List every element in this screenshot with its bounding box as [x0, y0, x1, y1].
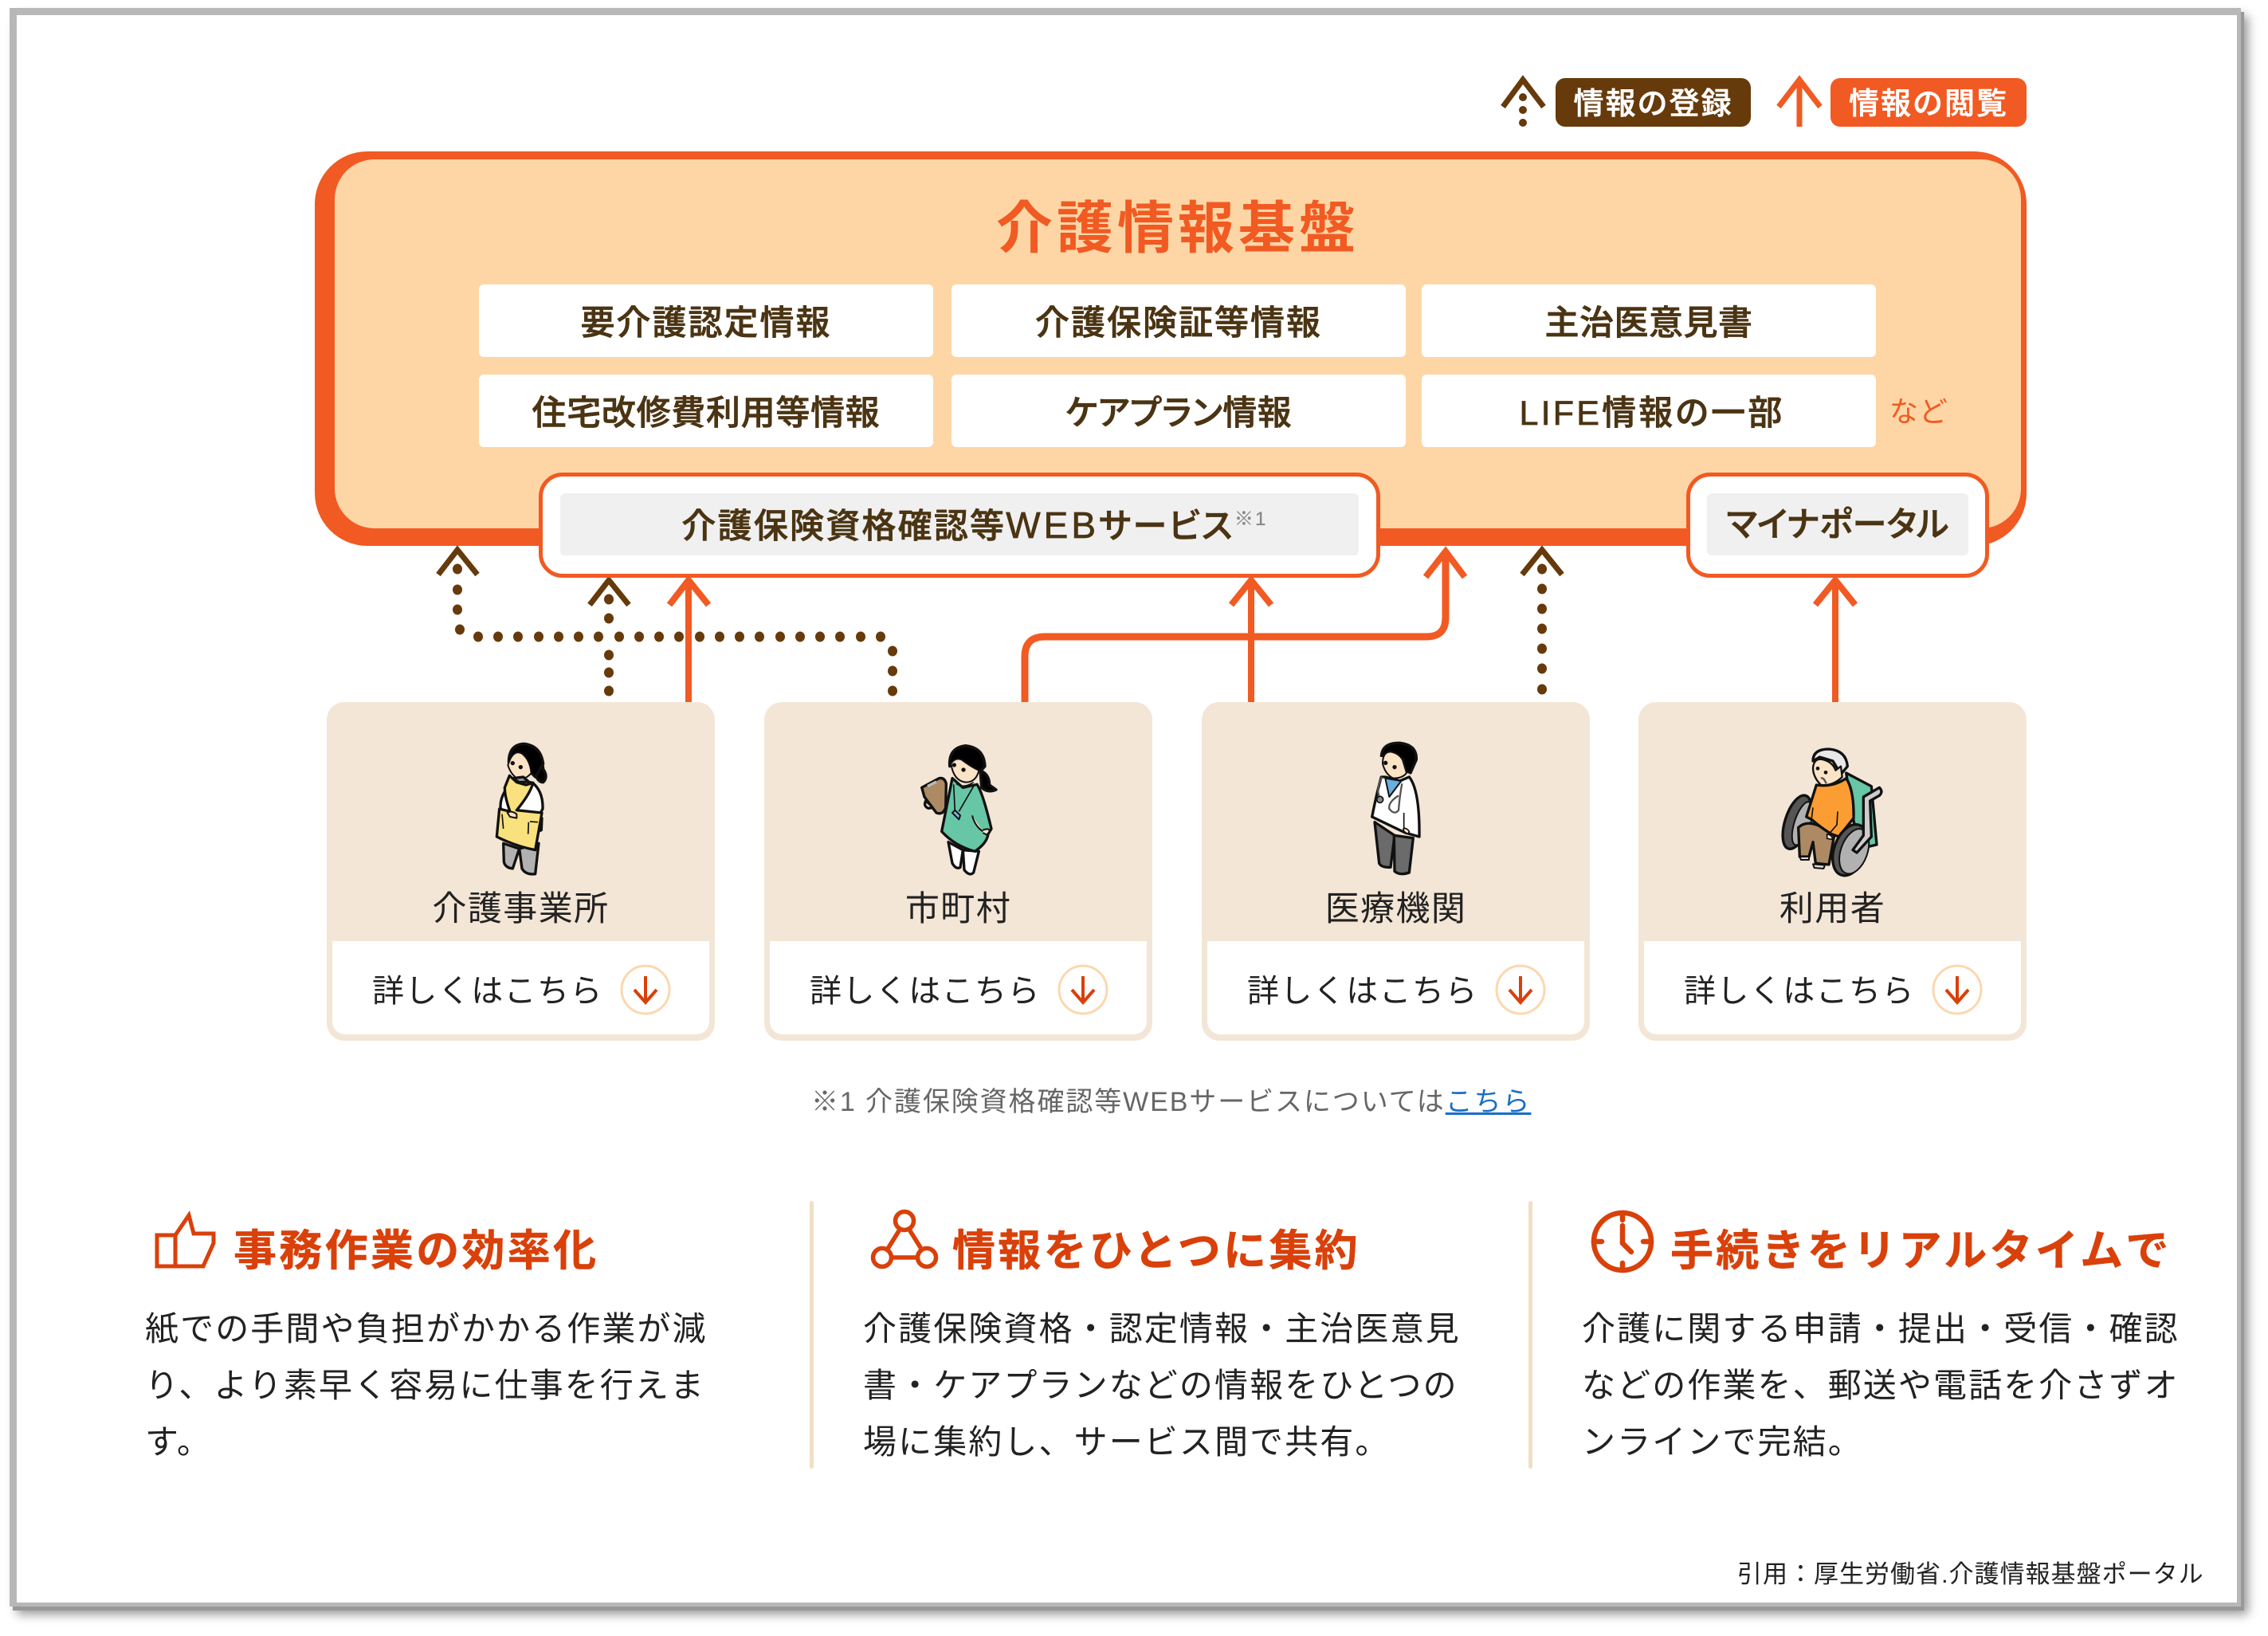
icon: down arrow: [620, 964, 671, 1015]
item: home renovation: 住宅改修費利用等情報: [532, 394, 880, 433]
benefit 1: heading: 事務作業の効率化: [233, 1227, 598, 1275]
title: 介護情報基盤: [996, 198, 1360, 261]
item: home renovation: [479, 375, 933, 447]
link text: 詳しくはこちら: [810, 974, 1041, 1009]
card label: 市町村: [905, 890, 1011, 928]
icon: down arrow: [1058, 964, 1108, 1015]
benefit 2: heading: 情報をひとつに集約: [952, 1227, 1360, 1275]
link text: 詳しくはこちら: [1684, 974, 1915, 1009]
item: LIFE: LIFE情報の一部: [1519, 394, 1785, 433]
arrow: care office view to web service: [666, 578, 711, 702]
item: care need certification: 要介護認定情報: [580, 304, 832, 343]
figure: doctor: [1371, 741, 1421, 875]
arrow: medical institution register to platform: [1520, 545, 1564, 695]
benefit 3: heading: 手続きをリアルタイムで: [1670, 1227, 2172, 1275]
link text: 詳しくはこちら: [1247, 974, 1478, 1009]
arrow: user view to myna portal: [1813, 578, 1858, 702]
benefit 1: icon thumbs up: [155, 1210, 215, 1269]
legend: view label: 情報の閲覧: [1849, 88, 2008, 121]
benefit 2: body: 場に集約し、サービス間で共有。: [863, 1423, 1391, 1461]
benefit 3: body: などの作業を、郵送や電話を介さずオ: [1582, 1367, 2180, 1404]
card label: 利用者: [1779, 890, 1885, 928]
link area: [1207, 941, 1584, 1034]
figure: wheelchair user: [1781, 747, 1883, 877]
divider 2: [1528, 1201, 1532, 1469]
link text: 詳しくはこちら: [372, 974, 603, 1009]
item: insurance card: [952, 284, 1406, 357]
divider 1: [810, 1201, 814, 1469]
benefit 2: body: 介護保険資格・認定情報・主治医意見: [863, 1310, 1461, 1348]
arrow: municipality view to platform: [1022, 546, 1468, 702]
figure: care worker: [496, 743, 547, 876]
benefit 3: body: 介護に関する申請・提出・受信・確認: [1582, 1310, 2180, 1348]
service box: web service: [539, 473, 1380, 578]
legend: view label: [1830, 78, 2027, 127]
legend: register label: [1556, 78, 1751, 127]
legend: view arrow: [1776, 75, 1823, 127]
link area: [332, 941, 709, 1034]
benefit 1: body: り、より素早く容易に仕事を行えま: [145, 1367, 705, 1404]
benefit 2: body: 書・ケアプランなどの情報をひとつの: [863, 1367, 1458, 1404]
item: care plan: [952, 375, 1406, 447]
service box: myna portal: [1686, 473, 1989, 578]
card: care office: [327, 702, 715, 1041]
item: insurance card: 介護保険証等情報: [1035, 304, 1322, 343]
arrows: dotted care office to web service: [587, 578, 631, 696]
icon: down arrow: [1932, 964, 1983, 1015]
benefit 3: body: [1582, 1310, 2180, 1461]
link area: [770, 941, 1147, 1034]
item: doctor opinion: [1422, 284, 1876, 357]
card: user: [1638, 702, 2027, 1041]
arrow: medical institution view to web service: [1229, 578, 1273, 702]
link area: [1644, 941, 2021, 1034]
card: municipality: [764, 702, 1152, 1041]
benefit 1: body: 紙での手間や負担がかかる作業が減: [145, 1310, 708, 1348]
web service name: 介護保険資格確認等WEBサービス※1: [681, 504, 1268, 546]
card label: 介護事業所: [432, 890, 609, 928]
text: etc: など: [1889, 395, 1948, 428]
legend: register arrow: [1501, 75, 1546, 127]
panel: care information platform: [315, 151, 2027, 546]
benefit 1: body: [145, 1310, 708, 1461]
card: medical institution: [1202, 702, 1590, 1041]
web service name: [560, 493, 1359, 555]
benefit 2: icon network: [870, 1210, 939, 1269]
legend: register label: 情報の登録: [1573, 88, 1732, 121]
item: LIFE: [1422, 375, 1876, 447]
myna portal name: [1707, 493, 1968, 555]
source citation: 引用：厚生労働省.介護情報基盤ポータル: [1737, 1560, 2204, 1588]
card label: 医療機関: [1325, 890, 1466, 928]
item: care need certification: [479, 284, 933, 357]
benefit 2: body: [863, 1310, 1461, 1461]
benefit 3: body: ンラインで完結。: [1582, 1423, 1863, 1461]
item: care plan: ケアプラン情報: [1065, 394, 1292, 433]
benefit 1: body: す。: [145, 1423, 212, 1461]
figure: municipal staff: [920, 744, 998, 875]
panel inner fill: [335, 159, 2021, 528]
item: doctor opinion: 主治医意見書: [1544, 304, 1753, 343]
benefit 3: icon clock: [1591, 1210, 1654, 1273]
dotted arrow to platform from municipality: [438, 550, 897, 696]
arrows: dotted path care office and municipality to platform: [436, 545, 897, 696]
myna portal name: マイナポータル: [1726, 506, 1949, 544]
footnote: ※1 介護保険資格確認等WEBサービスについてはこちら: [811, 1087, 1531, 1117]
icon: down arrow: [1495, 964, 1546, 1015]
